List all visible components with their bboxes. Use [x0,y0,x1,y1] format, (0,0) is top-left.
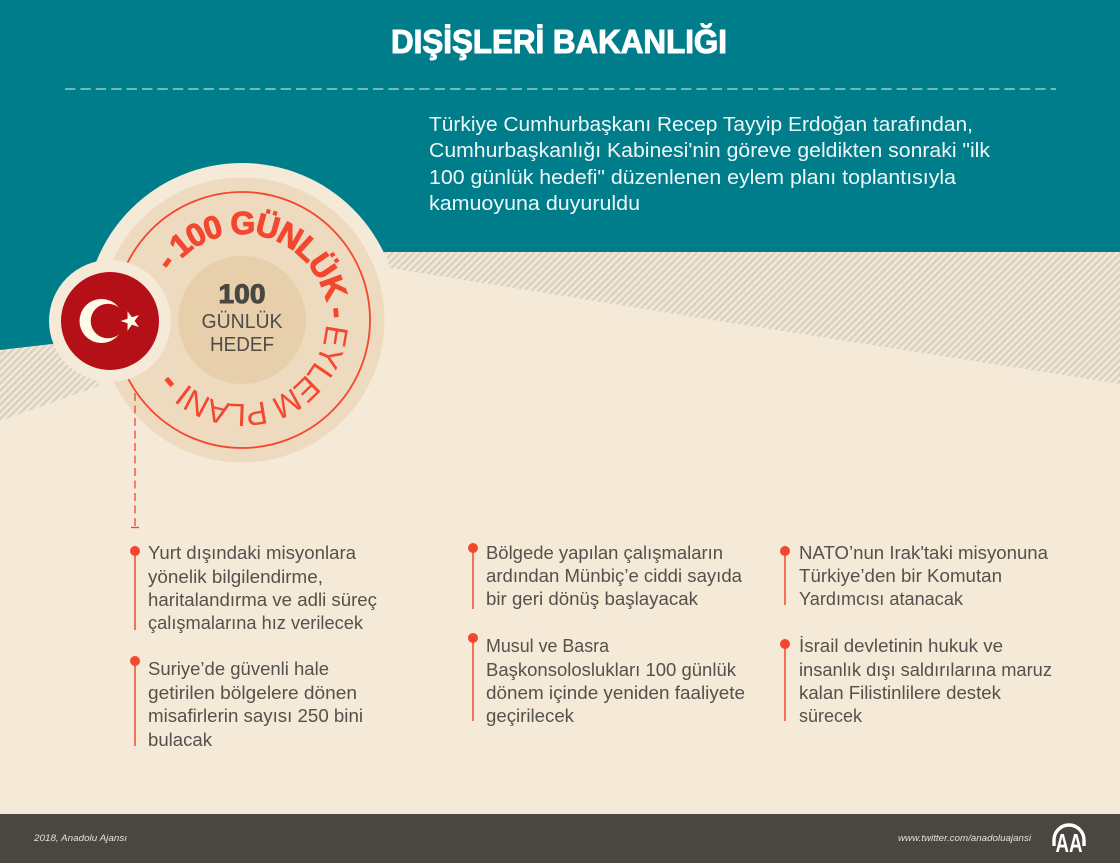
hatched band left [0,337,110,421]
item: Suriye'de güvenli hale: misafirlerin sayısı 250 bini [148,705,363,726]
item: İsrail devletinin hukuk ve: kalan Filistinlilere destek [799,682,1002,703]
item: NATO'nun Irak'taki misyonuna [780,542,1049,609]
footer [0,814,1120,863]
intro text: 100 günlük hedefi" düzenlenen eylem planı toplantısıyla [429,166,957,189]
item: Bölgede yapılan çalışmaların: Bölgede yapılan çalışmaların [486,542,723,563]
curved bold text: - 100 GÜNLÜK - [162,208,348,318]
item: Musul ve Basra: geçirilecek [486,705,575,726]
item: İsrail devletinin hukuk ve: insanlık dışı saldırılarına maruz [799,659,1052,680]
item: Musul ve Basra: Başkonsoloslukları 100 günlük [486,659,737,680]
badge inner circle [178,256,306,384]
item: NATO'nun Irak'taki misyonuna: Yardımcısı atanacak [799,588,964,609]
badge centre number: 100 [218,279,266,309]
item: Musul ve Basra: Musul ve Basra [486,635,610,656]
badge centre label [202,310,283,356]
flag of Turkey [49,260,171,382]
item: Yurt dışındaki misyonlara: Yurt dışındaki misyonlara [148,542,357,563]
item: Bölgede yapılan çalışmaların: bir geri dönüş başlayacak [486,588,699,609]
title: DIŞİŞLERİ BAKANLIĞI [391,23,727,60]
item: Yurt dışındaki misyonlara: çalışmalarına hız verilecek [148,612,364,633]
item: Bölgede yapılan çalışmaların [468,542,743,609]
item: Suriye'de güvenli hale: Suriye’de güvenli hale [148,658,329,679]
badge: 100 günlük eylem planı [96,163,384,462]
badge centre label: GÜNLÜK [202,310,283,333]
item: İsrail devletinin hukuk ve: sürecek [799,705,863,726]
item: NATO'nun Irak'taki misyonuna: NATO’nun Irak'taki misyonuna [799,542,1049,563]
item: Musul ve Basra: dönem içinde yeniden faaliyete [486,682,745,703]
badge centre label: HEDEF [210,333,274,356]
intro text: Cumhurbaşkanlığı Kabinesi'nin göreve geldikten sonraki "ilk [429,139,991,162]
item: Yurt dışındaki misyonlara [130,542,377,633]
item: NATO'nun Irak'taki misyonuna: Türkiye’den bir Komutan [799,565,1002,586]
teal header band [0,0,1120,350]
hatched band right [385,252,1120,384]
item: Suriye'de güvenli hale: getirilen bölgelere dönen [148,682,357,703]
item: Suriye'de güvenli hale [130,656,363,750]
curved light text: EYLEM PLANI [176,326,348,426]
curved closing dash: - [164,376,174,387]
icon: AA logo [1054,825,1084,858]
intro text [429,113,991,215]
item: Suriye'de güvenli hale: bulacak [148,729,213,750]
intro text: kamuoyuna duyuruldu [429,192,640,215]
item: Bölgede yapılan çalışmaların: ardından Münbiç’e ciddi sayıda [486,565,743,586]
icon: AA logo: AA [1056,828,1083,858]
item: Musul ve Basra [468,633,745,726]
footer credit: 2018, Anadolu Ajansı [33,833,127,844]
item: Yurt dışındaki misyonlara: yönelik bilgilendirme, [148,566,323,587]
item: İsrail devletinin hukuk ve: İsrail devletinin hukuk ve [799,635,1003,656]
footer url: www.twitter.com/anadoluajansi [898,833,1032,844]
intro text: Türkiye Cumhurbaşkanı Recep Tayyip Erdoğan tarafından, [429,113,973,136]
dashed connector [131,393,139,528]
item: İsrail devletinin hukuk ve [780,635,1052,726]
item: Yurt dışındaki misyonlara: haritalandırma ve adli süreç [148,589,377,610]
